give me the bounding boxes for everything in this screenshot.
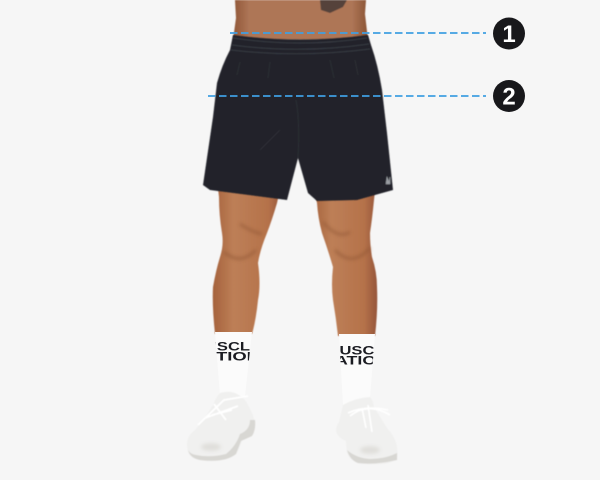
badge 2 [493, 80, 525, 112]
sock text: ATION [335, 356, 389, 368]
badge 1: 1 [502, 21, 516, 48]
torso [233, 0, 368, 40]
sock text: USCL [340, 346, 384, 358]
knee shading [224, 222, 370, 259]
left shoe [187, 392, 255, 461]
figure: model wearing shorts [187, 0, 398, 464]
shorts [203, 35, 393, 201]
sock text: USCL [205, 342, 250, 354]
right sock [339, 334, 375, 364]
measurement line 1 [230, 32, 486, 34]
infographic: shorts measurement guide [188, 0, 525, 464]
measurement line 2 [208, 95, 486, 97]
left sock [215, 332, 252, 360]
sock text: ATION [204, 352, 260, 364]
left leg [213, 180, 282, 334]
right leg [312, 180, 377, 336]
right shoe [336, 397, 398, 464]
badge 1 [493, 18, 525, 50]
logo on shorts [386, 177, 390, 184]
badge 2: 2 [502, 84, 516, 110]
